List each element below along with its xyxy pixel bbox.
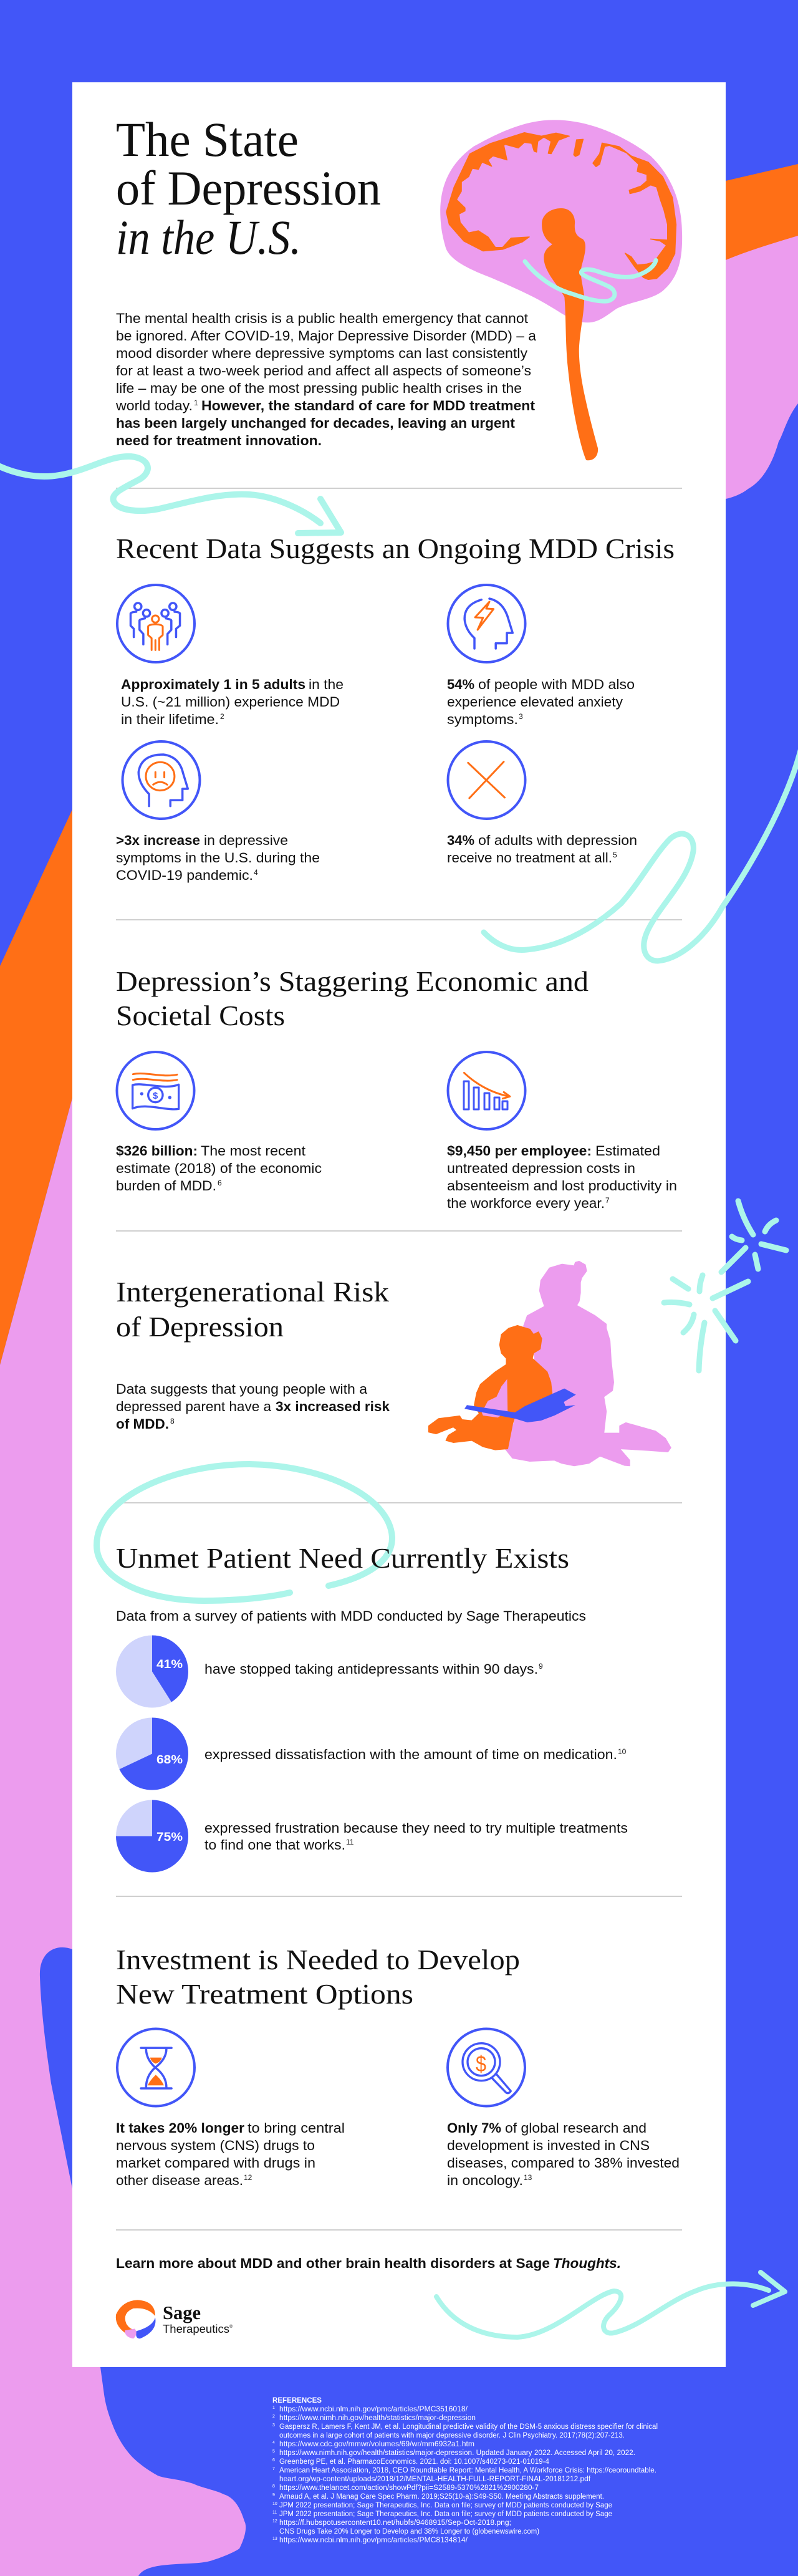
stat: 34 percent: 34% [447,832,474,848]
heading: recent data: Recent Data Suggests an Ongoing MDD Crisis [116,533,675,564]
text block: references: https://www.ncbi.nlm.nih.gov/pmc/articles/PMC8134814/ [279,2537,468,2544]
stat: 326 billion: 6 [218,1179,222,1187]
stat: 326 billion [116,1143,322,1194]
stat: 9450 per employee: absenteeism and lost productivity in [447,1178,677,1194]
stat: 1 in 5 adults: U.S. (~21 million) experience MDD [121,694,340,710]
stat: only 7 percent: 13 [524,2173,532,2182]
text block: references: REFERENCES [272,2396,322,2405]
text block: intro: The mental health crisis is a public health emergency that cannot [116,311,528,326]
stat: 34 percent: 5 [613,851,617,859]
callout: learn more: Learn more about MDD and other brain health disorders at Sage [116,2255,550,2271]
stat: 54 percent: 3 [519,712,523,721]
stat: 1 in 5 adults: in their lifetime. [121,712,219,727]
text block: references: 5 [272,2449,275,2454]
stat: 3x increase: in depressive [204,832,288,848]
text block: intro: world today. [115,398,193,413]
icon: magnifier with dollar [448,2029,525,2106]
chart: 75 percent pie [116,1800,188,1872]
stat: 20 percent longer [116,2120,345,2188]
text block: intro: be ignored. After COVID-19, Major Depressive Disorder (MDD) – a [116,328,537,344]
stat: 9450 per employee: $9,450 per employee: [447,1143,592,1159]
stat: 3x increase [116,832,320,883]
text block: intro: has been largely unchanged for decades, leaving an urgent [116,415,516,431]
stat: 9450 per employee: 7 [605,1196,610,1205]
text block: references: CNS Drugs Take 20% Longer to Develop and 38% Longer to (globenewswire.com) [279,2528,539,2535]
stat: 34 percent: of adults with depression [478,832,637,848]
text block: 41 percent: have stopped taking antidepressants within 90 days. [204,1661,538,1677]
text block: 68 percent: 10 [618,1747,627,1756]
heading: unmet need: Unmet Patient Need Currently Exists [116,1542,569,1574]
stat: only 7 percent: in oncology. [447,2173,523,2188]
icon: cross [448,741,525,819]
icon: head with sad face [122,741,200,819]
stat: 3x increase: 4 [254,868,258,877]
icon: group of people [117,585,195,662]
text block: intro: life – may be one of the most pressing public health crises in the [116,380,522,396]
text block: intro: 1 [194,398,198,407]
text block: references: 12 [272,2519,277,2524]
text block: references: outcomes in a large cohort of patients with major depressive disorder. J Clin Psychiatry. 2017;78(2):207-213. [279,2432,625,2439]
icon: magnifier with dollar: $ [476,2051,486,2077]
text block: 75 percent: expressed frustration because they need to try multiple treatments [204,1820,628,1836]
chart: 75 percent pie: 75% [156,1831,183,1844]
callout: learn more: Thoughts. [553,2255,621,2271]
squiggle: mint ellipse around heading [97,1464,392,1601]
text block: intro [115,311,537,448]
icon: brain illustration [440,120,682,460]
title: of Depression [116,161,381,215]
icon: declining bar chart [448,1052,525,1129]
text block: references: Gaspersz R, Lamers F, Kent JM, et al. Longitudinal predictive validity of the DSM-5 anxious distress specifier for clinical [279,2423,658,2431]
panel: economic costs [116,1052,677,1211]
icon: hourglass [117,2029,195,2106]
text block: intro: need for treatment innovation. [116,433,322,448]
heading: economic costs: Depression’s Staggering Economic and [116,965,589,997]
text block: references: 4 [272,2441,275,2445]
icon: banknote: $ [153,1091,158,1101]
stat: only 7 percent: diseases, compared to 38% invested [447,2155,680,2171]
text block: references: 9 [272,2493,275,2497]
text block: references: JPM 2022 presentation; Sage Therapeutics, Inc. Data on file; survey of MDD patients conducted by Sage [279,2502,612,2509]
stat: only 7 percent: development is invested in CNS [447,2138,650,2153]
stat: 3x increase: COVID-19 pandemic. [116,867,253,883]
stat: 326 billion: $326 billion: [116,1143,198,1159]
stat: 326 billion: burden of MDD. [116,1178,216,1194]
icon: head with lightning [448,585,525,662]
text block: references: 3 [272,2423,275,2428]
text block: survey intro: Data from a survey of patients with MDD conducted by Sage Therapeutics [116,1608,586,1624]
panel: crisis stats [116,585,637,883]
text block: risk: of MDD. [116,1416,169,1432]
stat: 1 in 5 adults [121,677,344,727]
stat: 9450 per employee: untreated depression costs in [447,1160,635,1176]
chart: 68 percent pie [116,1717,188,1790]
chart: 68 percent pie: 68% [156,1754,183,1767]
stat: 54 percent [447,677,635,727]
stat: 20 percent longer: 12 [244,2173,252,2182]
stat: 1 in 5 adults: Approximately 1 in 5 adults [121,677,305,692]
title: The State [116,112,299,166]
stat: 54 percent: symptoms. [447,712,518,727]
stat: only 7 percent: of global research and [505,2120,647,2136]
text block: references: JPM 2022 presentation; Sage Therapeutics, Inc. Data on file; survey of MDD patients conducted by Sage [279,2511,612,2518]
text block: risk [116,1381,390,1432]
text block: references: Greenberg PE, et al. PharmacoEconomics. 2021. doi: 10.1007/s40273-021-01019-4 [279,2458,550,2466]
text block: risk: 3x increased risk [276,1399,390,1414]
stat: 34 percent [447,832,637,866]
icon: Sage Therapeutics logo: ® [229,2324,233,2329]
chart: 41 percent pie [116,1635,188,1707]
title: in the U.S. [116,210,301,264]
text block: intro: However, the standard of care for MDD treatment [201,398,536,413]
stat: 54 percent: of people with MDD also [478,677,635,692]
icon: parent and child reading silhouette [429,1261,671,1466]
stat: 20 percent longer: market compared with drugs in [116,2155,315,2171]
icon: Sage Therapeutics logo: Therapeutics [163,2323,229,2335]
text block: references: 10 [272,2502,277,2506]
text block: references: https://www.cdc.gov/mmwr/volumes/69/wr/mm6932a1.htm [279,2441,474,2448]
stat: 54 percent: experience elevated anxiety [447,694,623,710]
text block: risk: 8 [170,1417,175,1425]
stat: 9450 per employee: the workforce every year. [447,1195,605,1211]
icon: Sage Therapeutics logo: Sage [163,2302,201,2323]
panel: white card [72,82,726,2367]
text block: risk: Data suggests that young people with a [116,1381,368,1397]
text block: references: Arnaud A, et al. J Manag Care Spec Pharm. 2019;S25(10-a):S49-S50. Meeting Abstracts supplement. [279,2493,604,2501]
arrow: bottom mint squiggle [436,2272,785,2337]
stat: 20 percent longer: other disease areas. [116,2173,243,2188]
text block: 75 percent [204,1820,628,1853]
arrow: top mint squiggle [0,456,341,533]
text block: 75 percent: 11 [346,1838,354,1846]
heading: investment: Investment is Needed to Develop [116,1944,520,1975]
text block: references: https://www.ncbi.nlm.nih.gov/pmc/articles/PMC3516018/ [279,2406,468,2413]
text block: 41 percent: 9 [539,1662,543,1671]
text block: references: https://www.thelancet.com/action/showPdf?pii=S2589-5370%2821%2900280-7 [279,2484,539,2492]
stat: 20 percent longer: nervous system (CNS) drugs to [116,2138,315,2153]
text block: references: 7 [272,2467,275,2471]
icon: Sage Therapeutics logo [116,2300,233,2338]
text block: references: 1 [272,2406,275,2410]
title [116,112,381,264]
heading: intergenerational risk [116,1276,389,1343]
heading: intergenerational risk: Intergenerational Risk [116,1276,389,1308]
text block: references: 13 [272,2537,277,2541]
text block: 68 percent: expressed dissatisfaction with the amount of time on medication. [204,1747,617,1762]
heading: economic costs: Societal Costs [116,1000,285,1031]
text block: references: 11 [272,2511,277,2515]
text block: references: https://www.nimh.nih.gov/health/statistics/major-depression [279,2414,476,2422]
heading: investment: New Treatment Options [116,1978,413,2010]
text block: references [272,2396,658,2544]
text block: intro: mood disorder where depressive symptoms can last consistently [116,345,527,361]
icon: banknote [117,1052,195,1129]
stat: 3x increase: symptoms in the U.S. during the [116,850,320,866]
text block: intro: for at least a two-week period and affect all aspects of someone’s [116,363,531,379]
heading: investment [116,1944,520,2010]
stat: 20 percent longer: to bring central [248,2120,345,2136]
text block: references: heart.org/wp-content/uploads/2018/12/MENTAL-HEALTH-FULL-REPORT-FINAL-20181212.pdf [279,2476,591,2483]
stat: 326 billion: estimate (2018) of the economic [116,1160,322,1176]
heading: intergenerational risk: of Depression [116,1311,284,1343]
text block: references: American Heart Association, 2018, CEO Roundtable Report: Mental Health, A Workforce Crisis: https://ceoroundtable. [279,2467,656,2474]
stat: 54 percent: 54% [447,677,474,692]
stat: 1 in 5 adults: 2 [220,712,224,721]
text block: references: 8 [272,2484,275,2489]
stat: 3x increase: >3x increase [116,832,200,848]
dividers [116,488,682,2230]
stat: 326 billion: The most recent [201,1143,305,1159]
text block: references: https://f.hubspotusercontent10.net/hubfs/9468915/Sep-Oct-2018.png; [279,2519,511,2527]
stat: 9450 per employee: Estimated [595,1143,660,1159]
text block: 75 percent: to find one that works. [204,1837,345,1853]
stat: 1 in 5 adults: in the [309,677,344,692]
stat: only 7 percent: Only 7% [447,2120,501,2136]
icon: mint sparkle bursts [664,1201,786,1371]
stat: 9450 per employee [447,1143,677,1211]
text block: references: 6 [272,2458,275,2463]
text block: references: https://www.nimh.nih.gov/health/statistics/major-depression. Updated January 2022. Accessed April 20, 2022. [279,2449,635,2457]
squiggle: mid mint line [484,748,798,961]
heading: economic costs [116,965,589,1031]
panel: investment stats [116,2029,680,2188]
chart: 41 percent pie: 41% [156,1658,183,1671]
stat: 20 percent longer: It takes 20% longer [116,2120,244,2136]
stat: 34 percent: receive no treatment at all. [447,850,612,866]
stat: only 7 percent [447,2120,680,2188]
text block: risk: depressed parent have a [116,1399,272,1414]
text block: references: 2 [272,2414,275,2419]
